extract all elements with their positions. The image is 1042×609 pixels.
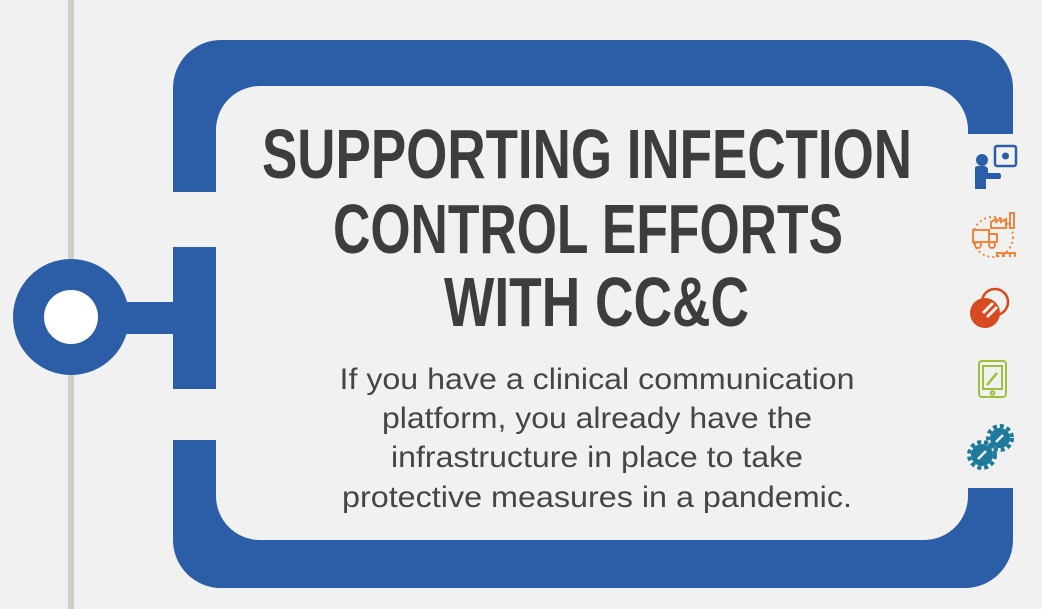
subtitle text: protective measures in a pandemic. <box>342 481 852 514</box>
subtitle text: If you have a clinical communication <box>340 363 854 396</box>
subtitle text <box>340 363 854 514</box>
subtitle text: infrastructure in place to take <box>391 441 803 474</box>
title: CONTROL EFFORTS <box>333 190 843 268</box>
panel: blue frame <box>170 40 1016 588</box>
icon: person at board <box>975 146 1016 189</box>
title <box>262 115 912 341</box>
title: WITH CC&C <box>444 263 749 341</box>
icon: overlapping circles <box>970 289 1008 328</box>
connector: circle node <box>13 259 176 375</box>
icon: gears <box>969 426 1012 468</box>
icon: tablet rocket <box>979 361 1006 397</box>
icon: logistics <box>973 213 1015 257</box>
subtitle text: platform, you already have the <box>382 402 812 435</box>
